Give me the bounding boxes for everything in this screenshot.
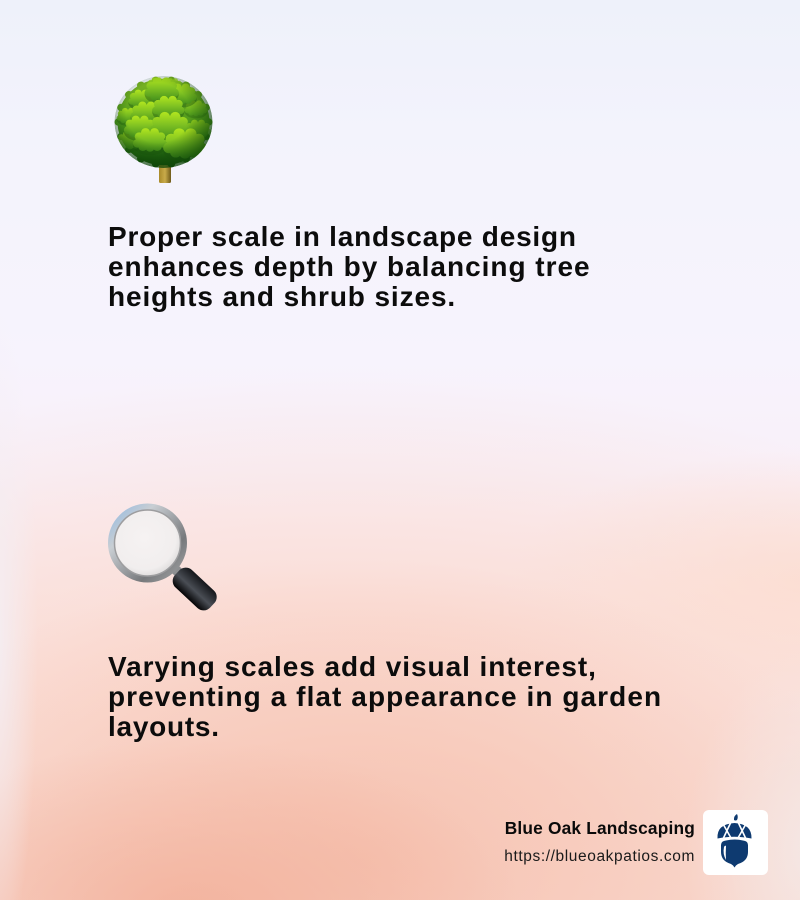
text block: varying scales: Varying scales add visual interest,	[108, 651, 597, 682]
text block: proper scale: heights and shrub sizes.	[108, 281, 456, 312]
icon: deciduous tree	[114, 76, 212, 183]
trunk	[159, 162, 171, 183]
handle	[169, 564, 220, 614]
lens and ring	[108, 504, 187, 582]
icon: magnifying glass	[108, 504, 217, 610]
text block: proper scale: Proper scale in landscape design	[108, 221, 577, 252]
logo: acorn	[703, 810, 768, 875]
neck	[170, 564, 184, 578]
text block: proper scale	[108, 221, 591, 312]
text block: proper scale: enhances depth by balancing tree	[108, 251, 591, 282]
website url: https://blueoakpatios.com	[504, 848, 695, 865]
acorn body	[721, 840, 748, 868]
acorn stem	[734, 814, 738, 820]
text block: varying scales	[108, 651, 662, 742]
text block: varying scales: preventing a flat appearance in garden	[108, 681, 662, 712]
brand name: Blue Oak Landscaping	[505, 818, 695, 838]
crown	[114, 76, 212, 168]
acorn cap	[717, 822, 752, 839]
text block: varying scales: layouts.	[108, 711, 220, 742]
